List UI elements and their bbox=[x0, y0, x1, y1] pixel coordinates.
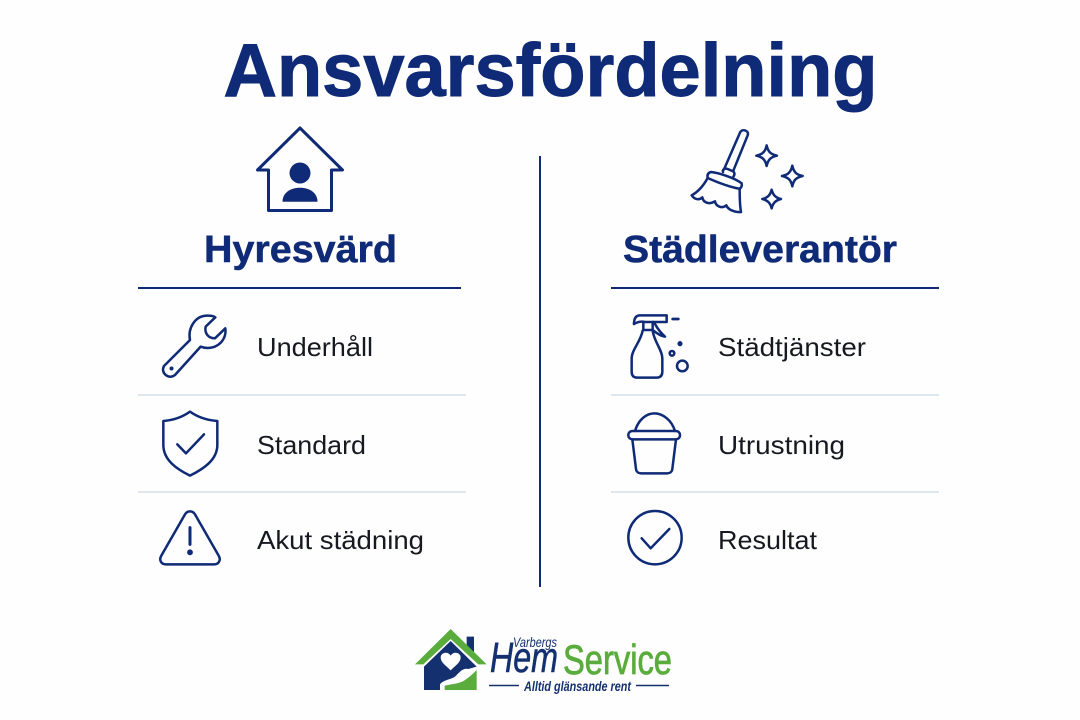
title: Ansvarsfördelning bbox=[224, 28, 878, 112]
logo: Varbergs HemService bbox=[415, 629, 672, 694]
label: Resultat: Resultat bbox=[718, 525, 818, 555]
heading: Hyresvärd: Hyresvärd bbox=[204, 229, 397, 271]
logo tagline: Alltid glänsande rent bbox=[523, 678, 632, 694]
icon: check circle bbox=[628, 511, 682, 564]
label: Utrustning: Utrustning bbox=[718, 430, 845, 460]
heading: Städleverantör: Städleverantör bbox=[623, 229, 897, 271]
icon: spray bottle bbox=[632, 315, 688, 378]
icon: house with person bbox=[258, 128, 342, 210]
row: Underhåll bbox=[163, 316, 373, 377]
panel: landlord column bbox=[138, 128, 466, 564]
row: Standard bbox=[163, 412, 366, 476]
row: Utrustning bbox=[628, 413, 845, 473]
label: Städtjänster: Städtjänster bbox=[718, 332, 866, 362]
icon: wrench bbox=[163, 316, 226, 377]
panel: cleaning supplier column bbox=[611, 130, 939, 564]
icon: shield with check bbox=[163, 412, 217, 476]
icon: broom with sparkles bbox=[692, 130, 803, 212]
label: Akut städning: Akut städning bbox=[257, 525, 424, 555]
row: Akut städning bbox=[160, 511, 424, 564]
logo text: Service: Service bbox=[563, 636, 672, 683]
label: Standard: Standard bbox=[257, 430, 366, 460]
icon dot bbox=[170, 366, 174, 370]
icon: warning triangle bbox=[160, 511, 220, 564]
logo text: Hem: Hem bbox=[490, 634, 558, 682]
label: Underhåll: Underhåll bbox=[257, 332, 373, 362]
icon: bucket bbox=[628, 413, 680, 473]
logo text: Varbergs: Varbergs bbox=[513, 634, 557, 650]
logo icon: house, heart and hand bbox=[415, 629, 487, 690]
row: Städtjänster bbox=[632, 315, 866, 378]
row: Resultat bbox=[628, 511, 818, 564]
